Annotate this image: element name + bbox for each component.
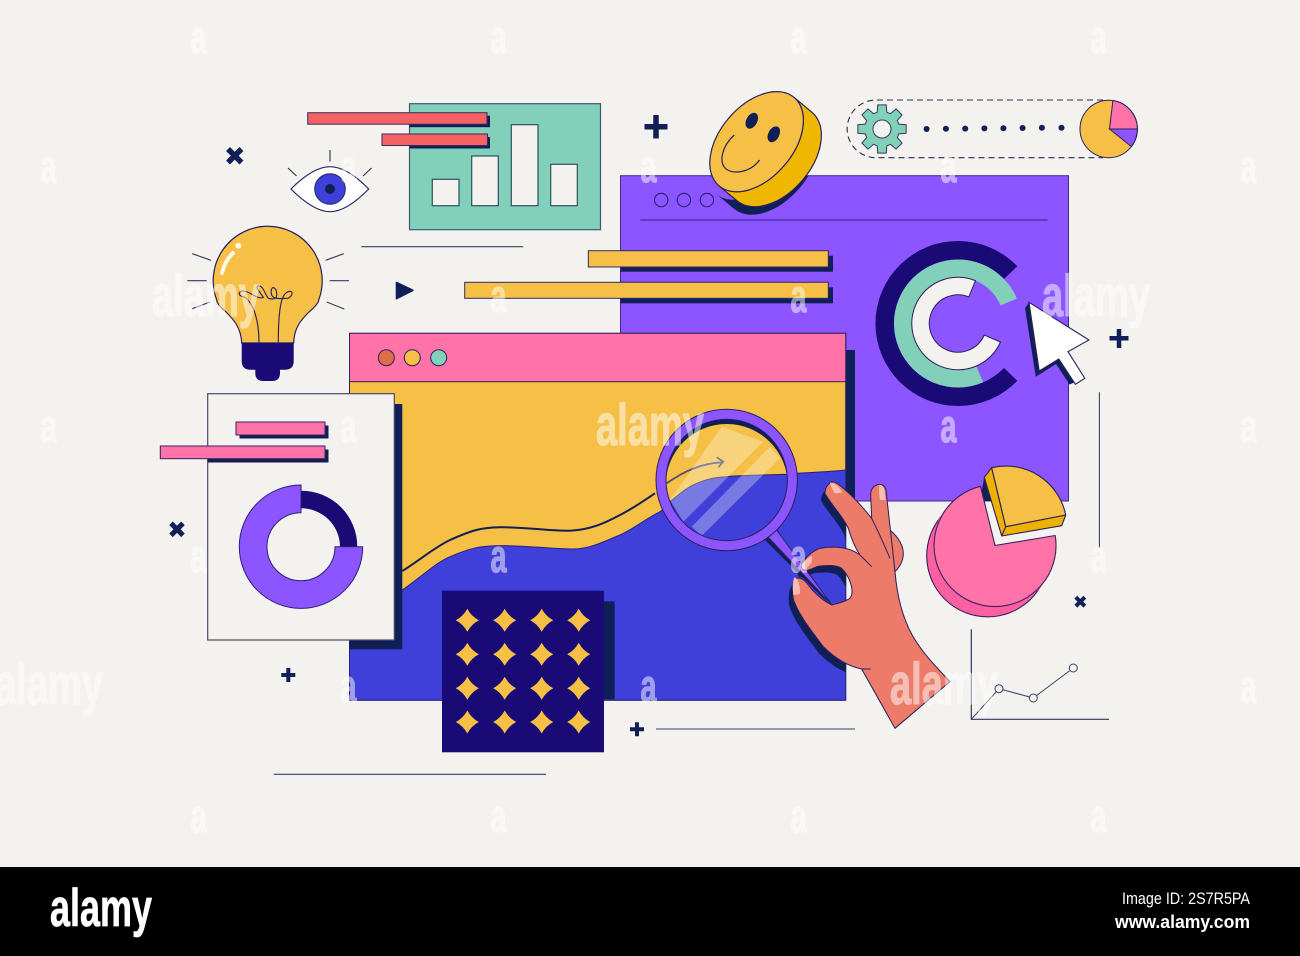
icon: plus bottom left [281,668,295,682]
ring chart [875,241,1017,406]
bottom line left [274,773,546,775]
icon: plus top [644,115,668,138]
panel: purple browser window [465,176,1068,501]
icon: x mark left [171,523,183,535]
watermarks: a [640,660,657,712]
watermarks: a [1090,530,1107,582]
watermarks: alamy [1042,264,1150,329]
watermarks: a [1240,140,1257,192]
watermarks: a [790,790,807,842]
hand shadow [788,491,846,672]
handle [765,530,832,605]
panel: teal bar chart card [308,104,600,230]
window dots [654,193,714,207]
progress dots [924,125,1064,132]
watermarks: alamy [596,393,704,458]
icon: plus bottom [630,722,644,736]
watermarks: alamy [890,652,998,717]
watermarks: a [790,11,807,63]
watermarks: a [640,140,657,192]
divider line under chart [361,246,523,248]
icon: mouse cursor [1025,302,1089,384]
watermarks: a [40,400,57,452]
hand holding magnifier [793,482,950,728]
icon: eye [288,150,372,212]
red label bars [308,113,490,148]
small line chart [971,629,1109,719]
watermarks: a [940,140,957,192]
icon: x mark right [1076,597,1085,606]
footer logo: alamy [50,879,152,938]
panel: main browser window [350,333,855,700]
watermarks: a [190,790,207,842]
3D pie chart [927,466,1066,617]
watermarks: a [490,530,507,582]
image id: Image ID: 2S7R5PA [1122,889,1251,908]
watermarks: a [790,270,807,322]
watermarks: a [1090,11,1107,63]
watermarks: a [490,11,507,63]
footer bar [0,867,1300,956]
window shadow [846,350,855,501]
panel: paper document with donut chart [160,394,402,649]
watermarks: a [340,660,357,712]
bottom line right [656,728,855,730]
lens [666,420,787,535]
fingernails [793,483,885,595]
gold stars [456,609,590,734]
yellow area [350,333,846,700]
magnifying glass [660,414,832,605]
vertical line right [1098,392,1100,548]
chart bars [432,125,577,206]
hand body [793,482,950,728]
lens arrow [667,457,723,483]
icon: plus right [1110,329,1128,348]
yellow pie slice [984,466,1066,536]
watermarks: a [190,11,207,63]
icon: light bulb [187,226,349,381]
lens ring [661,414,792,546]
pink label bars [160,422,328,462]
icon: gear [858,105,906,153]
yellow text bars [465,251,833,303]
watermarks: a [340,140,357,192]
website: www.alamy.com [1114,912,1250,932]
icon: smiley coin [709,91,822,215]
process pill with gear, dots and pie [847,100,1137,158]
watermarks: a [40,140,57,192]
watermarks: alamy [152,264,260,329]
watermarks: a [190,530,207,582]
panel: star pattern card [442,591,615,752]
watermarks: a [340,400,357,452]
icon: x mark top left [228,149,242,162]
finger creases [860,518,890,669]
watermarks: a [490,270,507,322]
icon: play triangle [396,282,413,299]
watermarks: a [790,530,807,582]
small pie chart [1080,100,1137,158]
pink title bar [350,333,846,382]
trend line [402,493,655,571]
title bar dots [378,350,447,366]
watermarks: a [1240,400,1257,452]
back finger [887,528,903,572]
blue wave area chart [350,470,846,700]
donut chart [239,485,363,608]
watermarks: a [490,790,507,842]
watermarks: a [940,400,957,452]
watermarks: a [1240,660,1257,712]
watermarks: a [1090,790,1107,842]
